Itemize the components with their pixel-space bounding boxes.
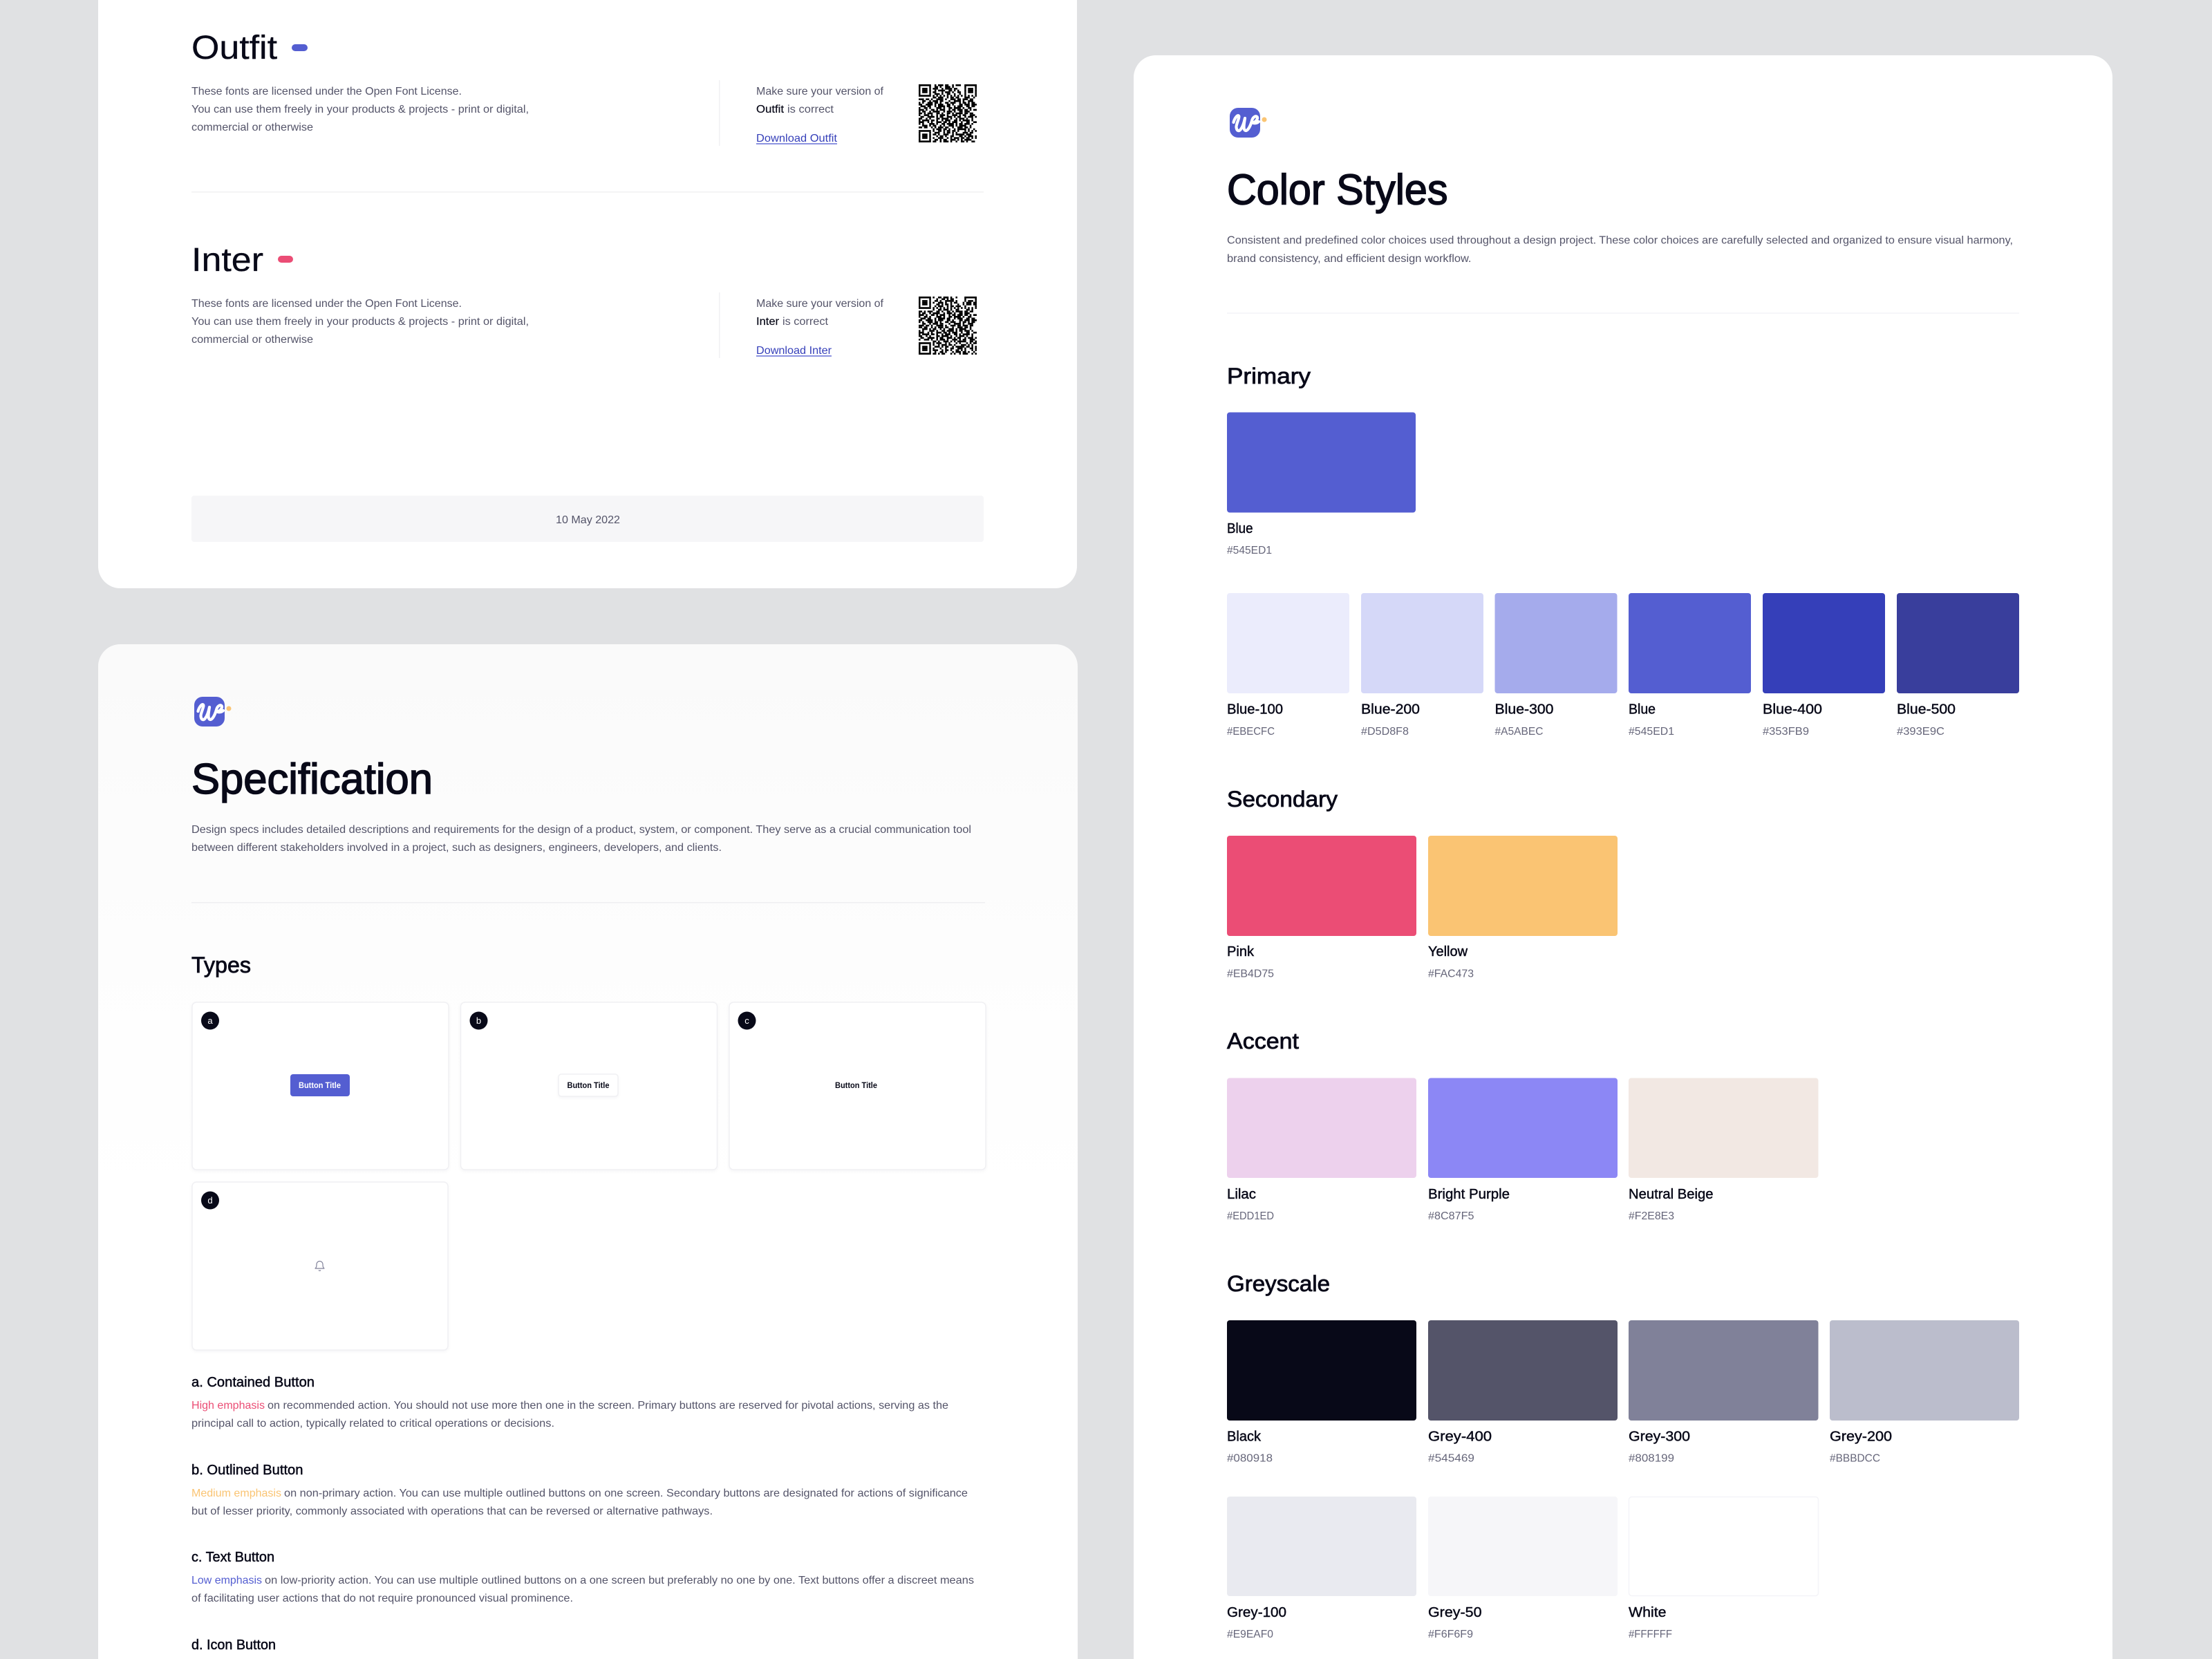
heading: Greyscale: Greyscale — [1227, 1271, 1330, 1296]
swatch: Blue-300: Blue-300 — [1494, 702, 1554, 718]
swatch: Blue primary: Blue — [1227, 521, 1253, 536]
swatch: Blue-100: #EBECFC — [1227, 726, 1275, 738]
swatch: Yellow: #FAC473 — [1428, 968, 1474, 980]
swatch: Black: #080918 — [1227, 1453, 1273, 1464]
swatch: Grey-200: Grey-200 — [1830, 1430, 1892, 1445]
heading: icon button: d. Icon Button — [191, 1638, 276, 1653]
swatch: Grey-50: Grey-50 — [1428, 1605, 1482, 1620]
text block: outlined button: but of lesser priority, commonly associated with operations that can be reversed or alternative pathways. — [191, 1506, 713, 1517]
text block: outlined button: b. Outlined Button — [191, 1463, 303, 1478]
swatch: Blue — [1629, 593, 1751, 738]
swatch: Blue-400: #353FB9 — [1763, 726, 1809, 738]
swatch: Blue-400 — [1763, 593, 1885, 738]
swatch: White — [1629, 1497, 1818, 1640]
card c: text button — [729, 1002, 986, 1170]
swatch: Black: Black — [1227, 1430, 1262, 1445]
text block: Inter licence: You can use them freely in your products & projects - print or digital, — [191, 316, 529, 328]
text block: contained button: principal call to action, typically related to critical operations or decisions. — [191, 1418, 554, 1430]
swatch: Blue-100 — [1227, 593, 1349, 738]
swatch: Pink: Pink — [1227, 944, 1255, 959]
text block: Outfit licence: commercial or otherwise — [191, 122, 313, 133]
text block: text button: c. Text Button — [191, 1550, 274, 1565]
text block: text button: of facilitating user actions that do not require pronounced visual prominence. — [191, 1593, 573, 1604]
link: Download Outfit: Download Outfit — [756, 133, 838, 144]
swatch: Grey-300 — [1629, 1320, 1818, 1464]
card d: icon button: d — [207, 1195, 213, 1206]
swatch: Blue-200: #D5D8F8 — [1361, 726, 1409, 738]
panel: color styles — [1134, 55, 2112, 1659]
heading: Outfit: Outfit — [191, 30, 277, 66]
swatch: Grey-50 — [1428, 1497, 1618, 1640]
title: Specification: Specification — [191, 756, 433, 803]
swatch: Lilac — [1227, 1078, 1416, 1222]
text block: specification description — [191, 824, 971, 854]
date bar — [191, 496, 984, 542]
swatch: Blue-500 — [1897, 593, 2019, 738]
swatch: Lilac: Lilac — [1227, 1187, 1256, 1202]
heading: Secondary: Secondary — [1227, 787, 1338, 812]
swatch: Blue primary: #545ED1 — [1227, 545, 1272, 556]
card a: contained button — [192, 1002, 449, 1170]
text block: Inter version check: Make sure your version of — [756, 298, 884, 310]
text block: Inter licence — [191, 298, 529, 346]
swatch: Grey-100: #E9EAF0 — [1227, 1629, 1273, 1640]
card a: contained button: a — [207, 1015, 213, 1026]
panel: font licences — [98, 0, 1077, 588]
text block: Outfit version check — [756, 86, 884, 115]
swatch: White: #FFFFFF — [1629, 1629, 1672, 1640]
swatch: Blue: #545ED1 — [1629, 726, 1674, 738]
swatch: Bright Purple: #8C87F5 — [1428, 1210, 1474, 1222]
text block: specification description: between different stakeholders involved in a project, such as designers, engineers, developers, and clients. — [191, 842, 722, 854]
text block: Inter version check: is correct — [782, 316, 829, 328]
swatch: Blue: Blue — [1629, 702, 1656, 718]
date bar: 10 May 2022 — [556, 514, 620, 526]
card b: outlined button — [460, 1002, 718, 1170]
swatch: Grey-400: #545469 — [1428, 1453, 1474, 1464]
swatch: Grey-100: Grey-100 — [1227, 1605, 1286, 1620]
swatch: Grey-300: Grey-300 — [1629, 1430, 1690, 1445]
swatch: Bright Purple — [1428, 1078, 1618, 1222]
swatch: Grey-100 — [1227, 1497, 1416, 1640]
text block: Outfit licence: You can use them freely in your products & projects - print or digital, — [191, 104, 529, 115]
swatch: Blue primary — [1227, 412, 1416, 556]
text block: text button: on low-priority action. You can use multiple outlined buttons on a one screen but preferably no one by one. Text buttons offer a discreet means — [265, 1575, 974, 1586]
swatch: Bright Purple: Bright Purple — [1428, 1187, 1510, 1202]
swatch: Pink: #EB4D75 — [1227, 968, 1274, 980]
swatch: Blue-300: #A5ABEC — [1494, 726, 1543, 738]
text block: specification description: Design specs includes detailed descriptions and requirements for the design of a product, system, or component. They serve as a crucial communication tool — [191, 824, 971, 836]
swatch: Blue-100: Blue-100 — [1227, 702, 1283, 718]
icon: logo — [1230, 108, 1266, 138]
panel: specification — [98, 644, 1078, 1659]
text block: Outfit licence: These fonts are licensed under the Open Font License. — [191, 86, 462, 97]
heading: Primary: Primary — [1227, 364, 1311, 388]
card b: outlined button: b — [476, 1015, 481, 1026]
swatch: Neutral Beige: Neutral Beige — [1629, 1187, 1713, 1202]
swatch: Blue-500: Blue-500 — [1897, 702, 1956, 718]
card c: text button: c — [744, 1015, 749, 1026]
swatch: Lilac: #EDD1ED — [1227, 1210, 1274, 1222]
text block: Inter version check — [756, 298, 884, 328]
swatch: Grey-50: #F6F6F9 — [1428, 1629, 1473, 1640]
text block: text button — [191, 1550, 974, 1604]
icon: pink pill — [278, 256, 293, 263]
swatch: Neutral Beige — [1629, 1078, 1818, 1222]
icon: blue pill — [292, 44, 308, 51]
text block: contained button: a. Contained Button — [191, 1375, 315, 1390]
text block: Outfit version check: Make sure your version of — [756, 86, 884, 97]
text block: outlined button: on non-primary action. You can use multiple outlined buttons on one screen. Secondary buttons are designated for actions of significance — [284, 1488, 968, 1499]
text block: text button: Low emphasis — [191, 1575, 262, 1586]
swatch: Grey-300: #808199 — [1629, 1453, 1674, 1464]
text block: contained button: High emphasis — [191, 1400, 265, 1412]
swatch: Blue-200 — [1361, 593, 1483, 738]
link: Download Inter: Download Inter — [756, 345, 832, 357]
swatch: Yellow — [1428, 836, 1618, 980]
text block: Inter licence: commercial or otherwise — [191, 334, 313, 346]
swatch: Grey-400: Grey-400 — [1428, 1430, 1492, 1445]
text block: Outfit version check: Outfit — [756, 104, 785, 115]
text block: Inter licence: These fonts are licensed under the Open Font License. — [191, 298, 462, 310]
icon: QR code Outfit — [919, 85, 977, 142]
swatch: Blue-300 — [1494, 593, 1618, 738]
title: Color Styles: Color Styles — [1227, 166, 1447, 214]
text block: contained button — [191, 1375, 948, 1430]
card d: icon button — [192, 1182, 448, 1350]
swatch: Blue-200: Blue-200 — [1361, 702, 1420, 718]
heading: Accent: Accent — [1227, 1029, 1299, 1053]
swatch: White: White — [1629, 1605, 1666, 1620]
text block: contained button: on recommended action. You should not use more then one in the screen. Primary buttons are reserved for pivotal actions, serving as the — [268, 1400, 948, 1412]
swatch: Blue-400: Blue-400 — [1763, 702, 1822, 718]
text block: outlined button: Medium emphasis — [191, 1488, 281, 1499]
swatch: Yellow: Yellow — [1428, 944, 1468, 959]
swatch: Blue-500: #393E9C — [1897, 726, 1944, 738]
heading: Inter: Inter — [191, 242, 263, 279]
swatch: Pink — [1227, 836, 1416, 980]
icon: logo — [194, 697, 231, 727]
icon: QR code Inter — [919, 297, 977, 354]
swatch: Grey-200: #BBBDCC — [1830, 1453, 1880, 1464]
swatch: Neutral Beige: #F2E8E3 — [1629, 1210, 1674, 1222]
text block: Outfit licence — [191, 86, 529, 133]
heading: Types: Types — [191, 953, 251, 977]
text block: Outfit version check: is correct — [787, 104, 834, 115]
card a: contained button: Button Title — [299, 1080, 341, 1090]
card b: outlined button: Button Title — [567, 1080, 610, 1090]
text block: color description: Consistent and predefined color choices used throughout a design project. These color choices are carefully selected and organized to ensure visual harmony, — [1227, 235, 2013, 246]
card c: text button: Button Title — [835, 1080, 877, 1090]
swatch: Grey-400 — [1428, 1320, 1618, 1464]
swatch: Grey-200 — [1830, 1320, 2019, 1464]
icon: bell — [315, 1261, 324, 1271]
text block: Inter version check: Inter — [756, 316, 780, 328]
text block: color description — [1227, 235, 2013, 265]
text block: outlined button — [191, 1463, 968, 1517]
swatch: Black — [1227, 1320, 1416, 1464]
text block: color description: brand consistency, and efficient design workflow. — [1227, 253, 1471, 265]
